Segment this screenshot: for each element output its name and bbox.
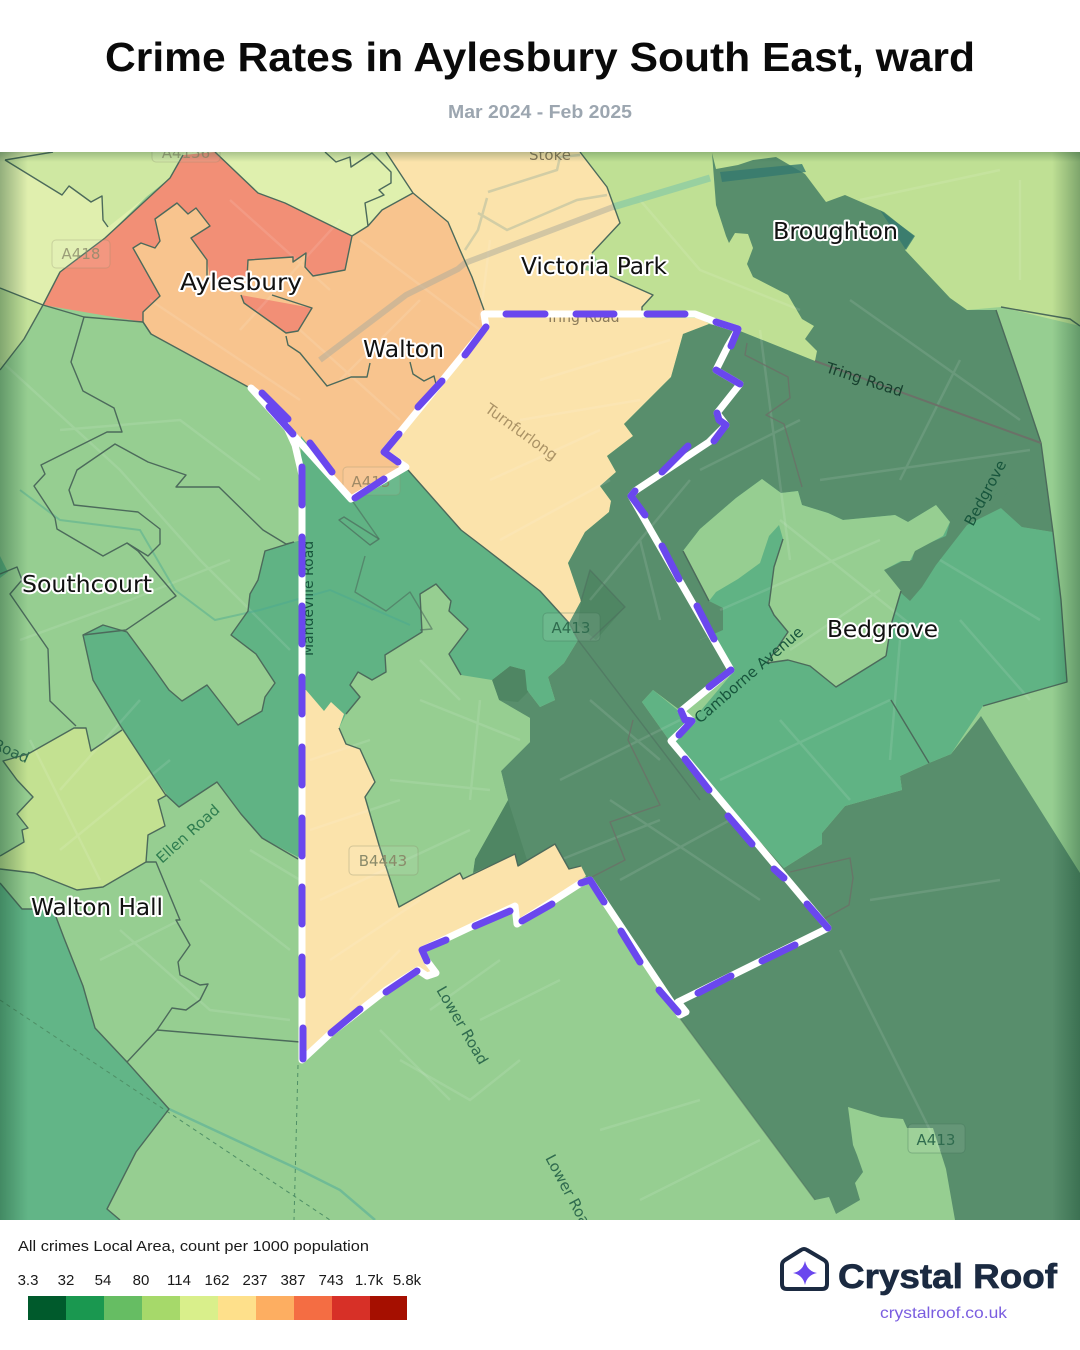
area: north-east green: [580, 152, 1080, 361]
area: Walton Hall, pale green: [0, 728, 167, 890]
icon: house with star: [782, 1249, 827, 1289]
road name: top edge: Stoke: [529, 146, 571, 164]
selected ward boundary: purple dashes: [262, 314, 828, 1059]
brand logo: [782, 1249, 1058, 1322]
area: central mid green: [301, 436, 578, 730]
shield: A413 centre: A413: [552, 619, 590, 637]
ward labels: [22, 219, 938, 921]
legend values: 80: [133, 1272, 149, 1289]
legend values: 743: [318, 1272, 344, 1289]
shield: B4443: [349, 846, 418, 875]
legend values: [18, 1272, 422, 1289]
legend values: 54: [95, 1272, 111, 1289]
area: Mandeville south, cream: [302, 690, 586, 1059]
area: Aylesbury red tongue: [241, 295, 312, 333]
area: dark green, Broughton and south-east: [473, 153, 1080, 1220]
area: Bedgrove east, mid green: [671, 479, 1067, 868]
brand name: Crystal Roof: [838, 1258, 1058, 1296]
legend values: 1.7k: [355, 1272, 384, 1289]
road name: Camborne Avenue: Camborne Avenue: [691, 623, 807, 727]
area: far west pale green: [0, 288, 43, 370]
legend values: 32: [58, 1272, 74, 1289]
shield: A4156: A4156: [162, 144, 210, 162]
area: top-left pale: [0, 152, 215, 305]
road name: Ellen Road: Ellen Road: [153, 801, 223, 867]
shield: A413 south: [908, 1124, 965, 1153]
shield: A418: [52, 240, 110, 268]
road name: Mandeville Road: Mandeville Road: [301, 541, 317, 656]
selected ward boundary: white underlay: [251, 314, 828, 1060]
area: north pale: [215, 152, 413, 236]
road shields: [52, 140, 965, 1153]
ward label: Victoria Park: Victoria Park: [521, 254, 668, 280]
road name: Lower Road north: Lower Road: [433, 983, 492, 1068]
road name: Tring Road west: Tring Road: [545, 310, 619, 326]
road name: Turnfurlong: Turnfurlong: [481, 399, 561, 464]
ward label: Walton: Walton: [363, 337, 444, 363]
area: small west patch: [0, 556, 8, 578]
area: darker dark-green patches: [473, 570, 625, 873]
map vignette: [0, 152, 1080, 1220]
legend title: All crimes Local Area, count per 1000 population: [18, 1238, 369, 1255]
area: dark strip round Bedgrove: [1001, 508, 1052, 532]
road network: [0, 170, 1040, 1200]
title: Crime Rates in Aylesbury South East, ward: [105, 34, 975, 80]
area: north-west pale green: [5, 152, 185, 227]
railway and river lines: [20, 155, 915, 1220]
shield: A4156: [152, 152, 220, 162]
area: Turnfurlong, cream: [384, 318, 709, 623]
shield: B4443: B4443: [359, 852, 407, 870]
area: Bedgrove, light green: [683, 479, 950, 687]
road name: Bedgrove: Bedgrove: [961, 457, 1010, 529]
brand url: crystalroof.co.uk: [880, 1305, 1008, 1322]
road names: [0, 146, 1010, 1237]
faint dashed footpaths: [0, 1000, 330, 1220]
area: Aylesbury, red: [43, 152, 352, 340]
legend values: 162: [204, 1272, 230, 1289]
ward label: Walton Hall: Walton Hall: [31, 895, 163, 921]
subtitle: date range: Mar 2024 - Feb 2025: [448, 102, 632, 122]
ward label: Southcourt: Southcourt: [22, 572, 152, 598]
shield: A418: A418: [62, 245, 100, 263]
area: south-west mid green: [0, 883, 169, 1220]
shield: A413 centre: [543, 613, 600, 641]
legend values: 3.3: [18, 1272, 38, 1289]
legend colour scale: [28, 1296, 407, 1320]
legend values: 237: [242, 1272, 268, 1289]
area: Walton and Aylesbury, orange: [133, 193, 486, 499]
area: south of A413, light green parcel: [339, 585, 530, 872]
legend: [18, 1238, 422, 1320]
ward label: Aylesbury: Aylesbury: [180, 270, 302, 296]
area: dark notch east of boundary: [700, 601, 735, 670]
legend values: 5.8k: [393, 1272, 422, 1289]
area boundary lines: [0, 152, 1080, 1220]
road name: Tring Road east: Tring Road: [823, 358, 905, 401]
shield: A413 north: [343, 467, 400, 495]
area: Southcourt south mid green: [83, 540, 302, 859]
shield: A413 north: A413: [352, 473, 390, 491]
ward label: Bedgrove: Bedgrove: [827, 617, 938, 643]
ward label: Broughton: Broughton: [773, 219, 898, 245]
road name: Lower Road south: Lower Road: [541, 1151, 598, 1237]
legend values: 114: [167, 1272, 191, 1289]
legend values: 387: [280, 1272, 306, 1289]
area: Victoria Park north, cream: [386, 152, 653, 318]
area: small patch on boundary: [642, 690, 684, 739]
shield: A413 south: A413: [917, 1131, 955, 1149]
